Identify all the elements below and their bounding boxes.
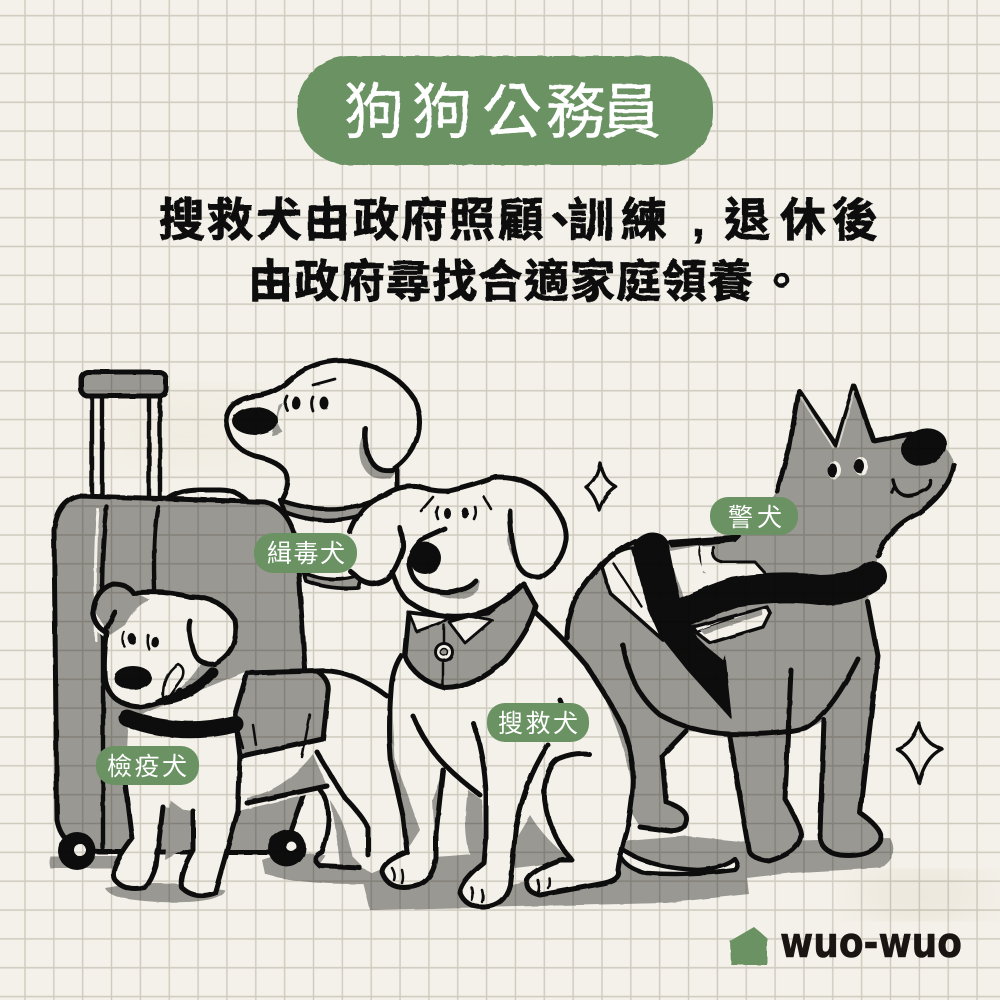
- logo: [730, 918, 962, 967]
- suitcase wheels: [58, 832, 96, 870]
- rescue dog body lines: [382, 613, 633, 907]
- quarantine dog head: [93, 584, 236, 706]
- tongue: [163, 664, 183, 698]
- police dog nose, eyes and mouth: [896, 422, 952, 472]
- label: rescue dog: 搜救犬: [498, 710, 578, 738]
- title pill: [297, 56, 713, 165]
- illustration: dogs and suitcase: [49, 361, 954, 910]
- suitcase handle: [92, 396, 160, 502]
- dog: quarantine dog: [93, 584, 395, 896]
- label: quarantine dog: 檢疫犬: [107, 753, 187, 781]
- suitcase body: [54, 496, 305, 852]
- dog: detection dog: [226, 361, 420, 590]
- dog: police dog: [567, 386, 954, 861]
- vest saddle: [602, 548, 663, 640]
- rescue dog tail: [620, 850, 738, 874]
- sparkle: lower: [897, 723, 942, 783]
- harness straps: [633, 532, 732, 720]
- rescue dog bib collar: [405, 584, 536, 688]
- label: quarantine dog: [96, 746, 199, 785]
- suitcase: [54, 372, 306, 870]
- rescue dog head: [350, 477, 566, 616]
- label: detection dog: 緝毒犬: [267, 540, 345, 568]
- label: police dog: 警犬: [728, 504, 782, 532]
- title: [297, 56, 713, 165]
- title text: 狗狗公務員: [344, 79, 661, 146]
- subtitle text: 由政府尋找合適家庭領養。: [248, 256, 804, 307]
- subtitle text: [159, 194, 878, 307]
- sparkle: upper: [586, 463, 616, 510]
- logo wordmark: wuo-wuo: [780, 918, 962, 967]
- label: rescue dog: [487, 703, 589, 742]
- subtitle text: 搜救犬由政府照顧、訓練,退休後: [159, 194, 878, 246]
- label: detection dog: [254, 533, 357, 573]
- icon: house: [730, 927, 767, 965]
- dog: rescue dog: [350, 477, 738, 907]
- label: police dog: [710, 497, 798, 535]
- ground shadows: [49, 836, 893, 910]
